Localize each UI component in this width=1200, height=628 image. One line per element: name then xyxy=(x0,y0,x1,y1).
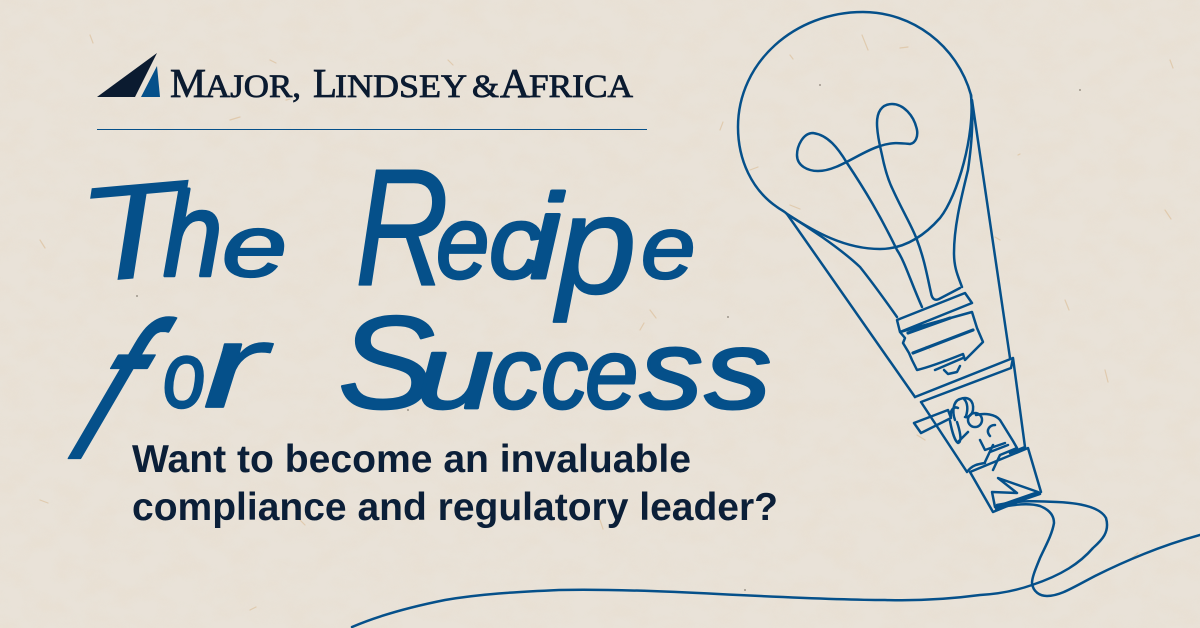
title word: for: f xyxy=(46,283,193,499)
title word: Success: c xyxy=(541,315,588,430)
title word: for: o xyxy=(163,323,205,428)
title word: Success: s xyxy=(705,308,771,432)
subheading xyxy=(132,438,778,529)
logo wordmark: L xyxy=(313,60,337,106)
logo wordmark: M xyxy=(170,60,206,106)
title word: Success: S xyxy=(338,289,435,437)
bulb glass xyxy=(738,12,972,249)
title word: Success: c xyxy=(491,317,541,430)
title word: for xyxy=(46,283,274,499)
subheading: Want to become an invaluable xyxy=(132,438,691,481)
title word: Success xyxy=(338,289,771,437)
logo wordmark: AJOR, xyxy=(205,69,301,105)
title word: Recipe: c xyxy=(489,185,542,301)
rope tail xyxy=(997,504,1200,596)
logo wordmark: & xyxy=(472,69,499,105)
person with telescope xyxy=(914,398,1017,470)
logo wordmark: INDSEY xyxy=(335,69,467,105)
title word: Recipe: e xyxy=(641,197,696,297)
bulb neck xyxy=(787,95,972,317)
icon: sail mark xyxy=(97,53,160,97)
title word: Success: u xyxy=(417,314,494,430)
screw base xyxy=(897,293,983,374)
logo wordmark: FRICA xyxy=(529,69,633,105)
title word: Recipe: R xyxy=(355,134,449,321)
title word: The: T xyxy=(71,151,199,312)
basket xyxy=(970,448,1041,512)
rope loop xyxy=(352,501,1107,627)
logo: Major, Lindsey & Africa xyxy=(97,53,633,106)
title word: Success: s xyxy=(640,308,702,432)
title word: Recipe xyxy=(355,134,696,323)
title word: Success: e xyxy=(585,317,638,429)
title word: The: h xyxy=(163,168,223,302)
title word: Recipe: p xyxy=(553,166,637,323)
header rule xyxy=(97,129,647,130)
logo wordmark: A xyxy=(500,60,530,106)
subheading: compliance and regulatory leader? xyxy=(132,486,778,529)
basket frame xyxy=(915,358,1025,472)
title word: The: e xyxy=(222,198,287,295)
title word: Recipe: e xyxy=(436,184,489,301)
title word: The xyxy=(71,151,287,312)
title word: Recipe: i xyxy=(530,169,564,304)
title: The Recipe for Success xyxy=(46,134,771,499)
title word: for: r xyxy=(203,299,274,433)
filament xyxy=(797,104,960,307)
illustration: light bulb hot-air balloon xyxy=(352,12,1200,627)
balloon ropes xyxy=(787,100,1010,397)
